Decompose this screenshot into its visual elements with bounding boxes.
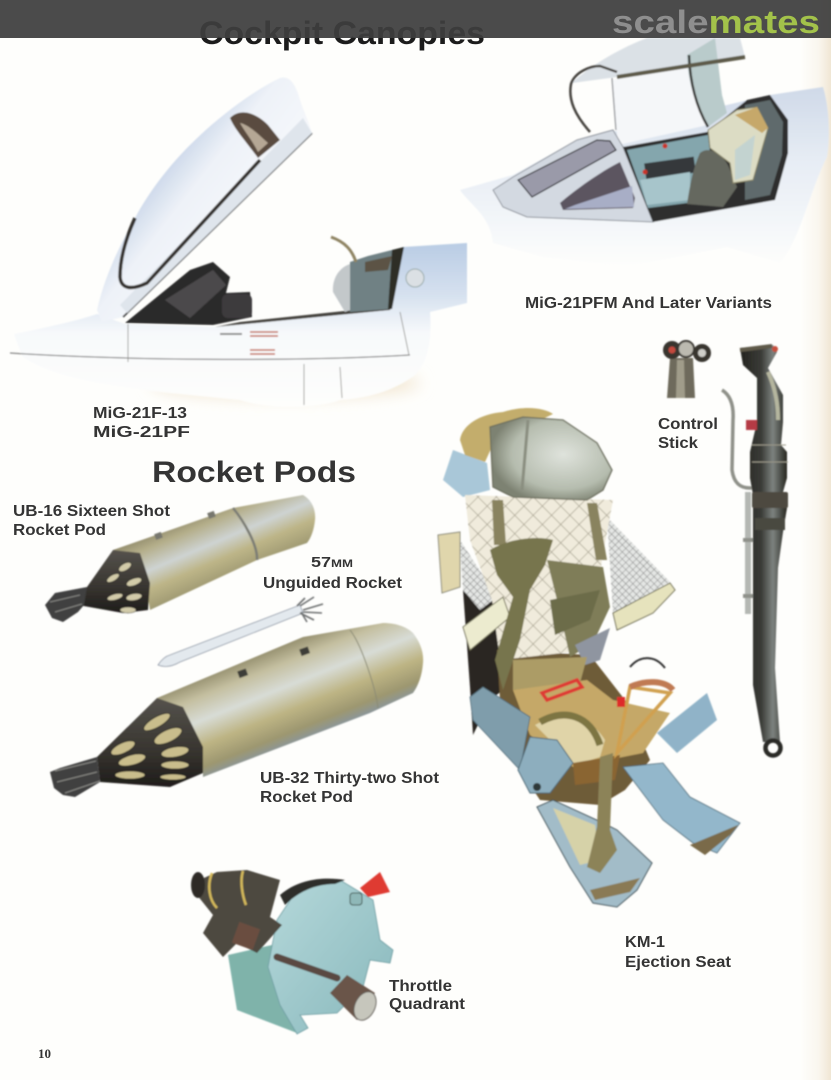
illustration: throttle quadrant (191, 870, 393, 1034)
caption: MiG-21F-13 / MiG-21PF (93, 405, 190, 441)
harness (490, 538, 553, 690)
base bracket (228, 945, 300, 1033)
red lever (360, 872, 390, 897)
caption: MiG-21F-13 / MiG-21PF: MiG-21F-13 (93, 405, 187, 422)
shoulder straps (492, 500, 506, 545)
fuselage (14, 243, 467, 407)
caption: UB-32: UB-32 Thirty-two Shot (260, 770, 439, 787)
paper edge shading (800, 0, 831, 1080)
illustration: KM-1 ejection seat (438, 408, 740, 907)
caption: MiG-21PFM And Later Variants: MiG-21PFM And Later Variants (525, 295, 772, 312)
windscreen frame (493, 130, 653, 222)
harness (687, 150, 737, 207)
cockpit tub (623, 95, 788, 222)
seat pan (513, 680, 670, 767)
illustration: MiG-21F-13 raised canopy (10, 77, 467, 407)
handle triangle (617, 687, 670, 753)
windscreen glass (518, 140, 616, 197)
right net (607, 517, 670, 613)
pads (463, 597, 510, 650)
belly tint (150, 368, 420, 398)
illustration: UB-32 rocket pod (50, 623, 423, 797)
fuselage (460, 87, 829, 267)
stick body (740, 345, 787, 742)
nose cone (97, 698, 203, 787)
ejection seat interior (125, 262, 252, 325)
motor (193, 870, 282, 957)
caption: 57mm Unguided Rocket: Unguided Rocket (263, 575, 402, 592)
caption: 57mm Unguided Rocket (263, 554, 402, 592)
under-seat filler (497, 650, 650, 805)
dark frame (463, 590, 503, 735)
instrument panel (627, 135, 712, 208)
caption: UB-32: Rocket Pod (260, 789, 353, 806)
left net (460, 540, 497, 610)
illustration: MiG-21PFM canopy (460, 38, 829, 267)
blue backing (443, 450, 490, 497)
rods (722, 390, 773, 488)
caption: UB-16: UB-16 Sixteen Shot (13, 503, 170, 520)
heading: Rocket Pods: Rocket Pods (152, 456, 356, 489)
quilted seat back (465, 495, 613, 660)
raised canopy (572, 38, 745, 83)
watermark: scalemates: scale mates (612, 4, 820, 40)
caption: Control Stick: Stick (658, 435, 698, 452)
disc (518, 737, 573, 793)
cylinder (330, 975, 375, 1020)
caption: Throttle Quadrant: Throttle (389, 978, 452, 995)
caption: UB-16 (13, 503, 170, 539)
nose cone (78, 550, 150, 613)
heading: Cockpit Canopies: Cockpit Canopies (199, 15, 485, 51)
right blue fairing (657, 693, 717, 753)
seat (708, 107, 768, 183)
caption: 57mm Unguided Rocket: 57 MM (311, 554, 353, 571)
caption: Throttle Quadrant (389, 978, 465, 1013)
rivet disc (406, 269, 424, 287)
centre strap (587, 753, 617, 873)
tube cluster (45, 587, 87, 622)
caption: Throttle Quadrant: Quadrant (389, 996, 465, 1013)
illustration: 57mm rocket (158, 597, 323, 666)
main body (268, 880, 393, 1034)
canopy frame (120, 160, 260, 288)
left box (470, 687, 530, 770)
canopy hood (230, 112, 280, 158)
red handle (542, 680, 582, 700)
side card (438, 532, 460, 593)
right leg (623, 763, 740, 853)
upper cushion (513, 657, 587, 690)
caption: KM-1 Ejection Seat: KM-1 (625, 934, 665, 951)
scalemates header bar (0, 0, 831, 40)
canopy shell (97, 77, 312, 322)
illustration: control stick grip detail (663, 341, 711, 398)
rear bulkhead (745, 100, 783, 200)
caption: Control Stick (658, 416, 718, 452)
caption: KM-1 Ejection Seat: Ejection Seat (625, 954, 731, 971)
caption: KM-1 Ejection Seat (625, 934, 731, 971)
instrument panel (333, 262, 357, 312)
left footrest (537, 800, 652, 907)
caption: UB-16: Rocket Pod (13, 522, 106, 539)
illustration: control stick (722, 345, 788, 756)
caption: Control Stick: Control (658, 416, 718, 433)
caption: MiG-21F-13 / MiG-21PF: MiG-21PF (93, 424, 190, 441)
arm (277, 957, 337, 978)
headrest (490, 417, 612, 500)
headrest pack (460, 408, 553, 462)
caption: UB-32 (260, 770, 439, 806)
illustration: UB-16 rocket pod (45, 495, 315, 622)
tube cluster (50, 757, 100, 797)
page number: 10 (38, 1046, 51, 1061)
red switch (746, 420, 757, 430)
dark slot (280, 879, 345, 905)
